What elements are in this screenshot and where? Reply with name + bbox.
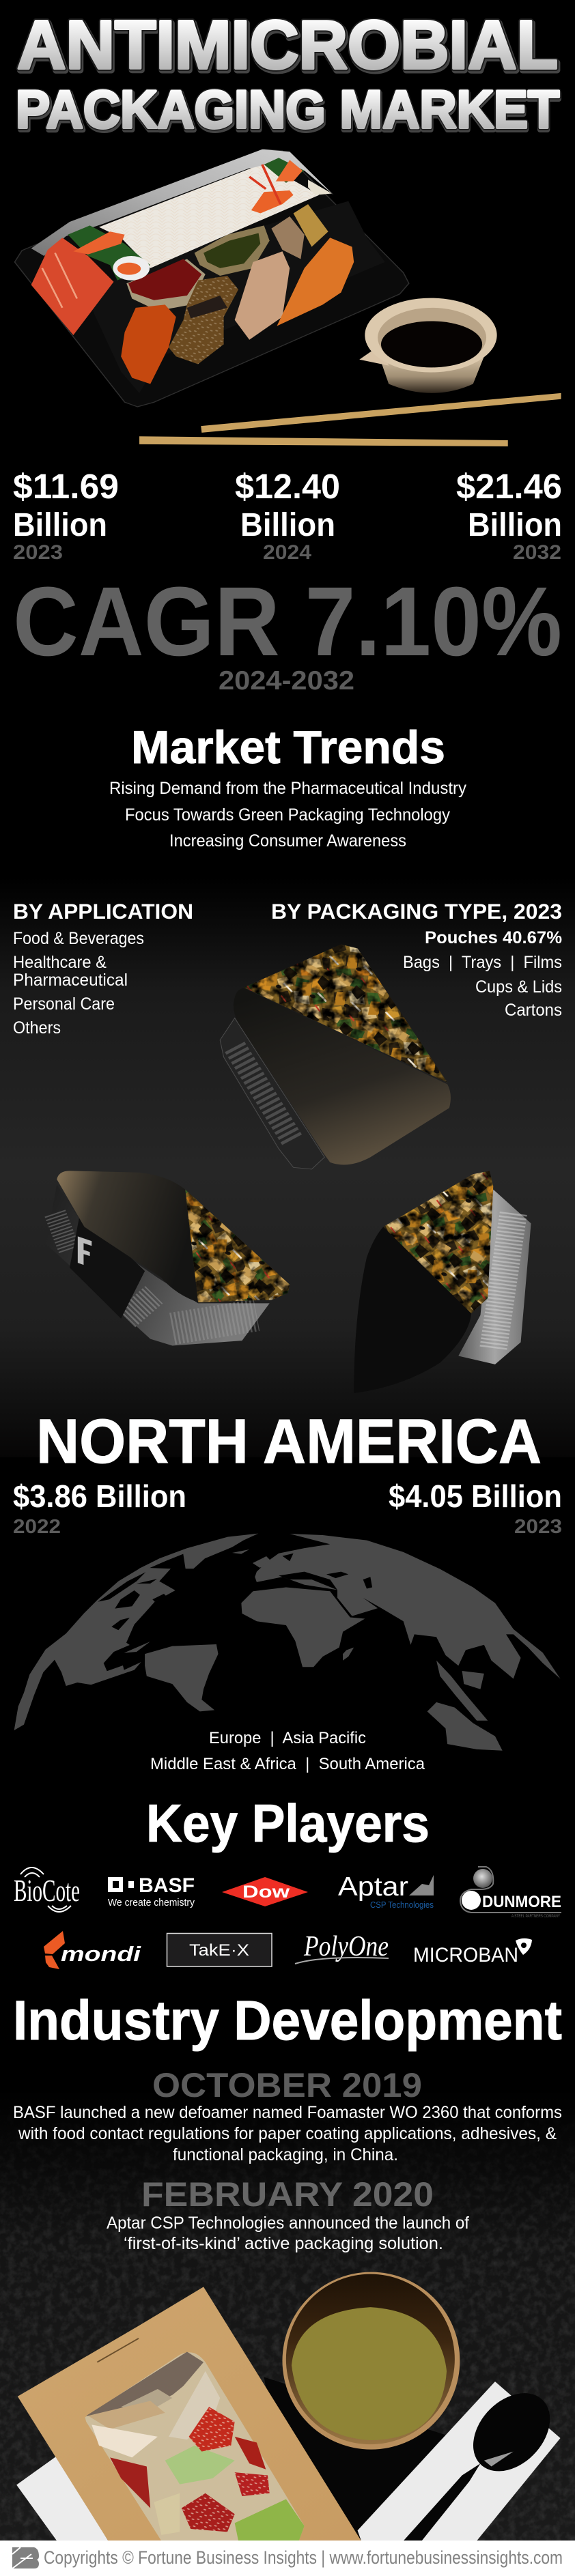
logo: Dow: Dow — [242, 1883, 290, 1902]
october 2019 description — [13, 2103, 562, 2164]
logo: BASF — [108, 1874, 195, 1908]
october 2019 heading: OCTOBER 2019 — [152, 2066, 422, 2104]
north america 2023 value — [389, 1478, 562, 1538]
market size 2023: $11.69 — [13, 467, 119, 506]
market size 2024: Billion — [240, 507, 335, 543]
logo: BioCote — [14, 1867, 80, 1912]
by packaging type list: Bags | Trays | Films — [403, 953, 562, 972]
logo: Aptar: CSP Technologies — [370, 1900, 434, 1910]
north america 2023 value: $4.05 Billion — [389, 1478, 562, 1514]
by application list: Personal Care — [13, 994, 115, 1014]
logo: mondi: mondi — [61, 1942, 142, 1966]
market size 2023: Billion — [13, 507, 107, 543]
segmentation panel background — [0, 877, 575, 1457]
february 2020 description: ‘first-of-its-kind’ active packaging solution. — [124, 2234, 443, 2253]
sauce cup — [359, 298, 497, 393]
by packaging type list: Pouches 40.67% — [425, 928, 562, 947]
north america 2022 value — [13, 1478, 186, 1538]
by application list — [13, 899, 193, 1037]
footer band — [0, 2541, 575, 2576]
by packaging type list: BY PACKAGING TYPE, 2023 — [271, 899, 562, 924]
other regions list — [150, 1729, 425, 1773]
october 2019 description: BASF launched a new defoamer named Foamaster WO 2360 that conforms — [13, 2103, 562, 2122]
market size 2032: 2032 — [513, 541, 561, 564]
title: PACKAGING MARKET — [16, 79, 559, 139]
market size 2023 — [13, 467, 119, 564]
by application list: BY APPLICATION — [13, 899, 193, 924]
market size 2032: $21.46 — [456, 467, 562, 506]
market trends list: Rising Demand from the Pharmaceutical Industry — [109, 779, 466, 798]
february 2020 description: Aptar CSP Technologies announced the launch of — [107, 2214, 469, 2233]
market size 2032 — [456, 467, 562, 564]
market size 2024 — [235, 467, 340, 564]
other regions list: Europe | Asia Pacific — [209, 1729, 366, 1747]
title — [16, 7, 559, 141]
logo: Dunmore — [460, 1867, 561, 1919]
market size 2024: $12.40 — [235, 467, 340, 506]
logo: Take-X — [167, 1933, 272, 1966]
logo: Dunmore: A STEEL PARTNERS COMPANY — [511, 1915, 560, 1919]
logo: Dunmore: DUNMORE — [482, 1893, 561, 1911]
tray: top right — [220, 944, 451, 1169]
title: PACKAGING MARKET — [16, 79, 559, 139]
title: ANTIMICROBIAL — [18, 9, 559, 85]
february 2020 description — [107, 2214, 469, 2253]
CAGR period: 2024-2032 — [219, 666, 354, 696]
north america heading: NORTH AMERICA — [36, 1407, 542, 1476]
logo: Dow — [222, 1877, 308, 1906]
by application list: Pharmaceutical — [13, 971, 128, 990]
logo: mondi — [44, 1931, 142, 1969]
market trends list: Increasing Consumer Awareness — [169, 831, 406, 850]
north america 2022 value: $3.86 Billion — [13, 1478, 186, 1514]
title: ANTIMICROBIAL — [17, 7, 558, 83]
logo: Microban: MICROBAN — [413, 1944, 518, 1966]
logo: BASF: We create chemistry — [108, 1897, 195, 1908]
logo: BASF: BASF — [139, 1874, 195, 1897]
logo: Take-X: TakE·X — [189, 1941, 249, 1960]
market size 2023: 2023 — [13, 541, 63, 564]
by packaging type list — [271, 899, 562, 1020]
october 2019 description: functional packaging, in China. — [173, 2145, 398, 2164]
by packaging type list: Cartons — [505, 1001, 562, 1020]
by packaging type list: Cups & Lids — [475, 977, 562, 997]
food photo: napkin, box, soup bowl and spoon — [16, 2272, 565, 2541]
north america 2022 value: 2022 — [13, 1516, 61, 1538]
by application list: Food & Beverages — [13, 929, 144, 948]
logo: BioCote: BioCote — [14, 1874, 80, 1908]
market trends list: Focus Towards Green Packaging Technology — [125, 805, 450, 825]
market trends heading: Market Trends — [131, 721, 445, 773]
market size 2032: Billion — [468, 507, 562, 543]
north america 2023 value: 2023 — [514, 1516, 562, 1538]
title: PACKAGING MARKET — [17, 81, 559, 141]
by application list: Others — [13, 1018, 61, 1037]
sushi tray illustration — [14, 149, 409, 407]
october 2019 description: with food contact regulations for paper coating applications, adhesives, & — [18, 2124, 557, 2143]
tray: bottom right — [354, 1171, 531, 1393]
by application list: Healthcare & — [13, 953, 107, 972]
logo: Aptar — [338, 1872, 434, 1910]
lower photo background — [0, 2089, 575, 2541]
title: ANTIMICROBIAL — [17, 7, 558, 83]
other regions list: Middle East & Africa | South America — [150, 1755, 425, 1773]
february 2020 heading: FEBRUARY 2020 — [141, 2175, 434, 2214]
market trends list — [109, 779, 466, 850]
world globe map — [14, 1534, 561, 1751]
footer logo — [12, 2547, 39, 2568]
key players heading: Key Players — [146, 1793, 430, 1853]
market size 2024: 2024 — [263, 541, 311, 564]
tray: bottom left — [46, 1171, 290, 1346]
chopsticks — [139, 393, 561, 446]
logo: Aptar: Aptar — [338, 1872, 408, 1902]
logo: PolyOne: PolyOne — [303, 1931, 389, 1962]
